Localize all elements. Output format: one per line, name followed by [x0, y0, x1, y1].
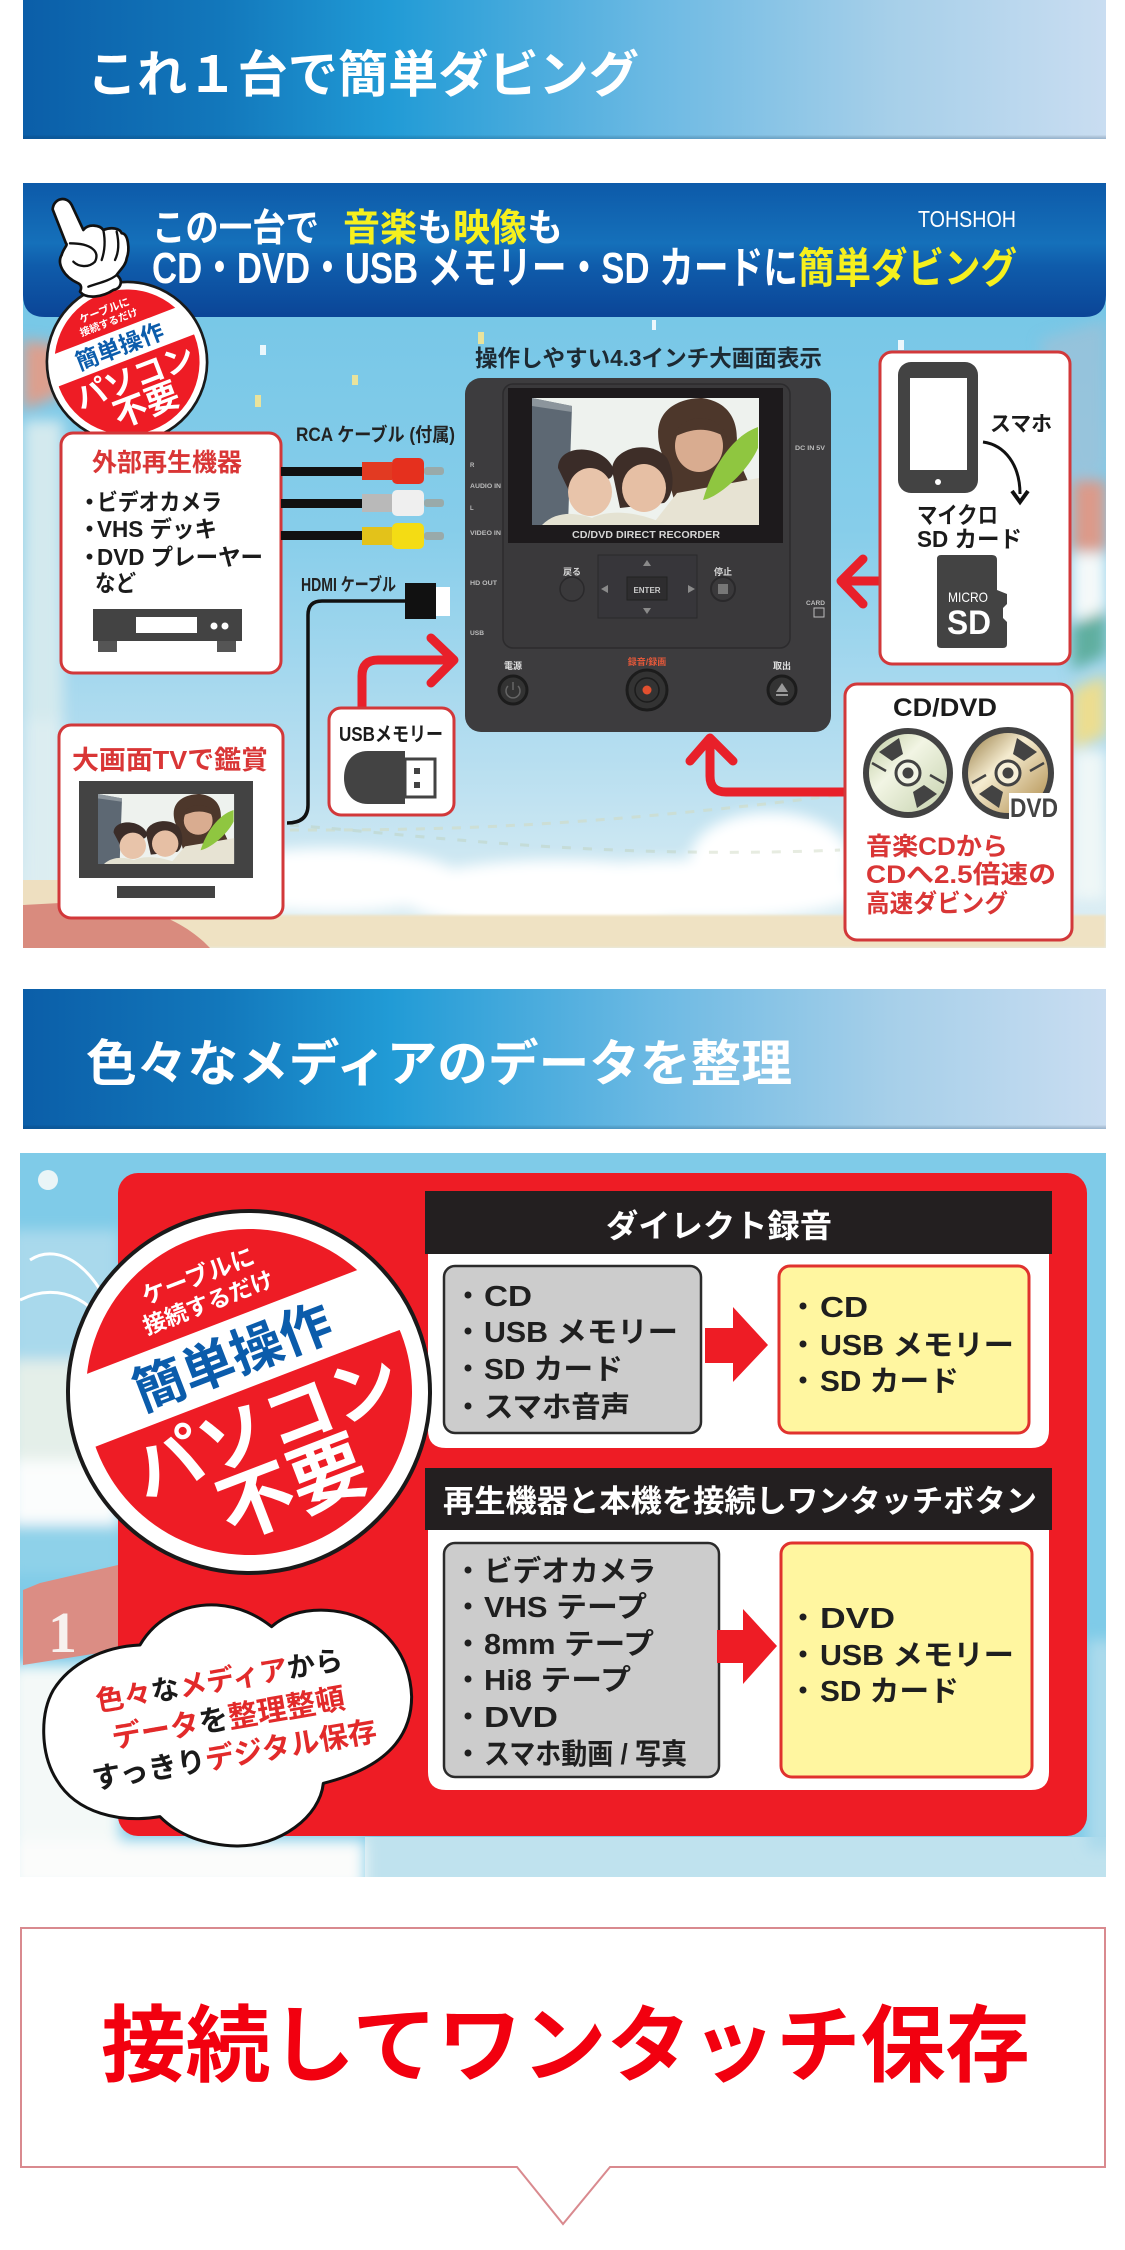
badge: 簡単操作 パソコン不要 (large) — [66, 1209, 432, 1575]
badge: 簡単操作 パソコン不要 (large): 簡単操作 — [125, 1294, 340, 1423]
box: external playback devices: など — [95, 570, 136, 596]
icon: DVD player — [93, 609, 242, 652]
block: one-touch recording: 再生機器と本機を接続しワンタッチボタン — [443, 1484, 1037, 1519]
blue banner: 簡単ダビング — [798, 245, 1017, 292]
source list: DVD — [484, 1702, 558, 1734]
box: external playback devices: VHS デッキ — [97, 516, 217, 542]
badge: 簡単操作 パソコン不要 (large): ケーブルに — [138, 1242, 259, 1311]
badge: 簡単操作 パソコン不要 (large): 接続するだけ — [139, 1266, 277, 1340]
callout cloud — [44, 1605, 412, 1846]
badge: 簡単操作 パソコン不要 (small): 不要 — [108, 376, 185, 435]
speech-bubble banner: 接続してワンタッチ保存: 接続してワンタッチ保存 — [101, 1999, 1030, 2093]
box: external playback devices: DVD プレーヤー — [97, 544, 263, 570]
source list: CD — [484, 1281, 532, 1313]
arrow: USB to device — [362, 638, 454, 708]
destination list: CD — [820, 1292, 868, 1324]
label: HDMI cable: HDMI ケーブル — [301, 574, 396, 595]
device: CD/DVD direct recorder: AUDIO IN — [470, 484, 501, 490]
icon: CD disc — [866, 731, 950, 815]
box: CD/DVD: CD/DVD — [893, 694, 997, 722]
device screen photo — [532, 398, 759, 525]
destination list: USB メモリー — [820, 1640, 1014, 1672]
blue banner: この一台で — [152, 208, 319, 250]
section header: これ1台で簡単ダビング — [23, 0, 1106, 139]
section header: 色々なメディアのデータを整理: 色々なメディアのデータを整理 — [86, 1036, 792, 1092]
box: large TV: 大画面TVで鑑賞 — [72, 745, 268, 775]
device: CD/DVD direct recorder: 電源 — [504, 660, 522, 671]
device: CD/DVD direct recorder: CD/DVD DIRECT RECORDER — [572, 530, 721, 541]
destination list — [781, 1543, 1032, 1777]
box: external playback devices: ビデオカメラ — [97, 489, 222, 515]
speech-bubble banner: 接続してワンタッチ保存 — [21, 1928, 1105, 2224]
panel: media data organisation: 1 — [48, 1600, 77, 1665]
box: external playback devices: ・ — [78, 544, 101, 570]
red backing panel — [118, 1173, 1087, 1836]
box: external playback devices: ・ — [78, 489, 101, 515]
blue banner: CD・DVD・USB メモリー・SD カードに — [152, 244, 798, 293]
device: CD/DVD direct recorder: VIDEO IN — [470, 531, 501, 537]
box: smartphone and microSD: スマホ — [990, 413, 1052, 436]
arrow — [717, 1609, 777, 1684]
badge: 簡単操作 パソコン不要 (small): ケーブルに — [77, 295, 131, 326]
badge: 簡単操作 パソコン不要 (small): 簡単操作 — [72, 318, 168, 375]
label: RCA cable: RCA ケーブル (付属) — [296, 423, 455, 446]
icon: microSD card: SD — [947, 604, 991, 642]
blue banner: 映像 — [453, 208, 527, 250]
box: CD/DVD: 音楽CDから — [866, 833, 1008, 861]
block: direct recording — [425, 1191, 1052, 1448]
source list: USB メモリー — [484, 1317, 678, 1349]
blue banner: 音楽 — [343, 208, 417, 250]
callout cloud: 色々なメディアから — [93, 1643, 345, 1717]
box: external playback devices: 外部再生機器 — [92, 449, 242, 477]
icon: pointing hand — [53, 199, 128, 297]
destination list — [779, 1266, 1029, 1433]
device: CD/DVD direct recorder: 停止 — [714, 566, 732, 577]
arrow: phone box to device — [841, 559, 882, 604]
badge: 簡単操作 パソコン不要 (small): 接続するだけ — [78, 305, 140, 339]
device: CD/DVD direct recorder: R — [470, 463, 475, 469]
box: external playback devices — [61, 433, 281, 673]
blue banner — [23, 183, 1106, 317]
box: large TV — [59, 725, 283, 918]
block: one-touch recording — [425, 1468, 1052, 1790]
source list: スマホ動画 / 写真 — [484, 1738, 687, 1771]
arrow — [705, 1307, 768, 1382]
device: CD/DVD direct recorder: ENTER — [633, 586, 661, 595]
block: direct recording: ダイレクト録音 — [606, 1208, 832, 1244]
RCA cables — [281, 458, 444, 549]
badge: 簡単操作 パソコン不要 (large): 不要 — [207, 1422, 379, 1556]
icon: microSD card — [937, 555, 1007, 648]
device: CD/DVD direct recorder: DC IN 5V — [795, 446, 825, 452]
blue banner: TOHSHOH — [918, 206, 1016, 232]
badge: 簡単操作 パソコン不要 (small) — [46, 280, 208, 432]
device: CD/DVD direct recorder: 戻る — [563, 567, 581, 577]
box: USB memory: USBメモリー — [339, 724, 443, 746]
section header: 色々なメディアのデータを整理 — [23, 989, 1106, 1129]
source list: SD カード — [484, 1354, 623, 1386]
destination list: SD カード — [820, 1676, 959, 1708]
callout cloud: すっきりデジタル保存 — [89, 1714, 379, 1796]
icon: DVD disc: DVD — [1010, 793, 1058, 823]
source list — [444, 1543, 719, 1777]
device: CD/DVD direct recorder: L — [470, 506, 474, 512]
HDMI cable and plug — [287, 583, 450, 823]
box: external playback devices: ・ — [78, 516, 101, 542]
icon: DVD disc — [965, 730, 1058, 823]
box: smartphone and microSD: マイクロ — [917, 502, 998, 528]
source list — [444, 1266, 701, 1433]
box: CD/DVD: 高速ダビング — [866, 889, 1008, 918]
box: CD/DVD: CDへ2.5倍速の — [866, 861, 1056, 889]
box: CD/DVD — [845, 684, 1072, 940]
icon: microSD card: MICRO — [948, 589, 988, 605]
source list: ビデオカメラ — [484, 1554, 656, 1588]
device: CD/DVD direct recorder: 録音/録画 — [628, 656, 666, 667]
destination list: USB メモリー — [820, 1330, 1014, 1362]
box: USB memory — [329, 708, 454, 815]
destination list: DVD — [820, 1603, 895, 1635]
source list: Hi8 テープ — [484, 1664, 631, 1697]
callout cloud: データを整理整頓 — [109, 1681, 348, 1755]
TV screen photo — [98, 794, 234, 864]
curved arrow — [983, 442, 1028, 502]
arrow: CD/DVD to device — [690, 738, 846, 792]
badge: 簡単操作 パソコン不要 (large): パソコン — [122, 1340, 411, 1514]
section header: これ1台で簡単ダビング: これ１台で簡単ダビング — [87, 47, 639, 103]
source list: スマホ音声 — [484, 1391, 630, 1424]
badge: 簡単操作 パソコン不要 (small): パソコン — [71, 339, 199, 416]
heading: 4.3 inch screen: 操作しやすい4.3インチ大画面表示 — [475, 345, 822, 371]
panel: media data organisation — [10, 1153, 1117, 1890]
device: CD/DVD direct recorder: CARD — [806, 601, 826, 607]
device: CD/DVD direct recorder: HD OUT — [470, 581, 497, 587]
icon: USB stick — [344, 751, 435, 804]
device: CD/DVD direct recorder: 取出 — [773, 660, 791, 671]
source list: VHS テープ — [484, 1591, 647, 1624]
panel: connection diagram — [23, 183, 1106, 948]
blue banner: も — [527, 208, 563, 250]
icon: smartphone — [898, 362, 978, 493]
blue banner: も — [417, 208, 453, 250]
box: smartphone and microSD: SD カード — [917, 526, 1022, 552]
device: CD/DVD direct recorder: USB — [470, 631, 485, 637]
box: smartphone and microSD — [880, 352, 1070, 664]
device: CD/DVD direct recorder — [465, 378, 831, 732]
destination list: SD カード — [820, 1366, 959, 1398]
source list: 8mm テープ — [484, 1628, 654, 1661]
